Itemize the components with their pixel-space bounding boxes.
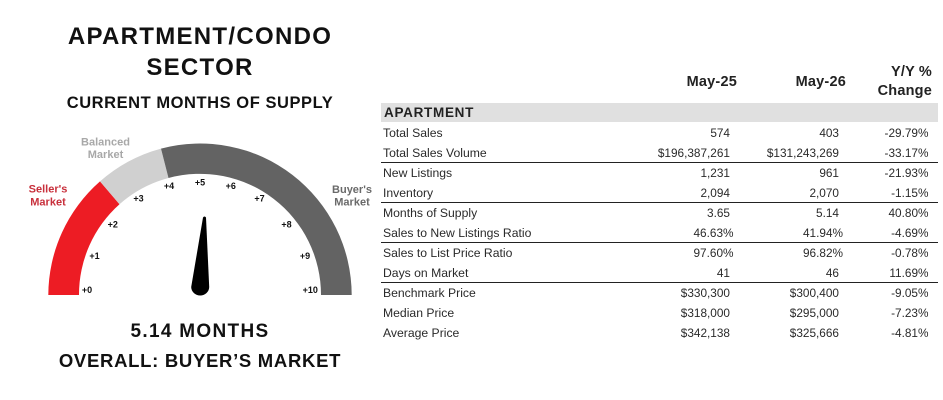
table column heading: May-25: May-25 (687, 74, 737, 90)
row: average price (383, 326, 928, 340)
gauge segment: seller's market (48, 181, 119, 295)
table column heading: Y/Y change: Y/Y % (891, 64, 932, 80)
row: sales to list price ratio: -0.78% (891, 246, 928, 260)
row: new listings (383, 166, 928, 180)
row: sales to new listings ratio: -4.69% (891, 226, 928, 240)
table column heading: Y/Y change: Change (878, 83, 932, 99)
gauge value: 5.14 MONTHS (131, 321, 269, 342)
row: sales to list price ratio (383, 246, 928, 260)
gauge chart (29, 137, 372, 296)
row: median price: $318,000 (681, 306, 730, 320)
row: sales to list price ratio: Sales to List Price Ratio (383, 246, 512, 260)
gauge segment: buyer's market (161, 144, 352, 295)
row: days on market: 41 (717, 266, 730, 280)
row: new listings: 961 (819, 166, 839, 180)
subtitle: CURRENT MONTHS OF SUPPLY (67, 94, 333, 112)
row: inventory (383, 186, 928, 200)
row: median price: Median Price (383, 306, 454, 320)
row: days on market: 46 (826, 266, 839, 280)
table column heading: May-26: May-26 (796, 74, 846, 90)
table column heading: Y/Y change (878, 64, 932, 99)
row: days on market: Days on Market (383, 266, 468, 280)
gauge scale labels: +1 (89, 251, 100, 261)
gauge scale labels: +7 (254, 194, 265, 204)
row: total sales volume: $131,243,269 (767, 146, 839, 160)
gauge scale labels: +5 (195, 178, 205, 188)
gauge scale labels: +3 (133, 194, 144, 204)
gauge scale labels: +2 (108, 220, 118, 230)
row: new listings: New Listings (383, 166, 452, 180)
row: sales to list price ratio: 96.82% (803, 246, 843, 260)
row: average price: -4.81% (891, 326, 928, 340)
row: benchmark price: $330,300 (681, 286, 730, 300)
gauge scale labels: +8 (281, 220, 292, 230)
label: seller's market: Seller's (29, 184, 67, 196)
row: benchmark price (383, 286, 928, 300)
row: average price: $342,138 (681, 326, 730, 340)
row: months of supply: 5.14 (816, 206, 839, 220)
row: days on market (383, 266, 928, 280)
table section band (381, 103, 938, 122)
label: seller's market (29, 184, 67, 208)
row: months of supply (383, 206, 928, 220)
gauge segment: balanced market (100, 149, 168, 204)
row: sales to new listings ratio: Sales to New Listings Ratio (383, 226, 531, 240)
row: new listings: -21.93% (885, 166, 928, 180)
label: balanced market (81, 137, 130, 161)
row: average price: $325,666 (790, 326, 839, 340)
row: inventory: 2,070 (809, 186, 839, 200)
label: balanced market: Market (88, 149, 124, 161)
row: median price: $295,000 (790, 306, 839, 320)
row: benchmark price: -9.05% (891, 286, 928, 300)
row: total sales: Total Sales (383, 126, 443, 140)
row: new listings: 1,231 (700, 166, 730, 180)
row: months of supply: Months of Supply (383, 206, 477, 220)
label: buyer's market: Buyer's (332, 184, 372, 196)
gauge scale labels: +6 (226, 181, 236, 191)
label: seller's market: Market (30, 196, 66, 208)
row: sales to new listings ratio (383, 226, 928, 240)
label: buyer's market (332, 184, 372, 208)
row: months of supply: 40.80% (888, 206, 928, 220)
row: inventory: 2,094 (700, 186, 730, 200)
market verdict: OVERALL: BUYER’S MARKET (59, 350, 341, 371)
needle (191, 216, 209, 296)
row: total sales volume (383, 146, 928, 160)
row: months of supply: 3.65 (707, 206, 730, 220)
row: sales to new listings ratio: 41.94% (803, 226, 843, 240)
row: inventory: -1.15% (891, 186, 928, 200)
label: balanced market: Balanced (81, 137, 130, 149)
row: benchmark price: Benchmark Price (383, 286, 476, 300)
table section band: APARTMENT (384, 105, 474, 120)
gauge scale labels (82, 178, 318, 295)
gauge scale labels: +0 (82, 285, 92, 295)
label: buyer's market: Market (334, 196, 370, 208)
row: benchmark price: $300,400 (790, 286, 839, 300)
title: APARTMENT/CONDO (68, 23, 332, 50)
row: total sales: -29.79% (885, 126, 928, 140)
gauge scale labels: +9 (300, 251, 310, 261)
row: days on market: 11.69% (889, 266, 928, 280)
row: total sales (383, 126, 928, 140)
row: average price: Average Price (383, 326, 459, 340)
row: total sales: 403 (819, 126, 839, 140)
gauge scale labels: +10 (303, 285, 318, 295)
row: inventory: Inventory (383, 186, 433, 200)
gauge scale labels: +4 (164, 181, 174, 191)
row: sales to list price ratio: 97.60% (693, 246, 734, 260)
row: total sales volume: Total Sales Volume (383, 146, 487, 160)
row: median price (383, 306, 928, 320)
row: total sales volume: $196,387,261 (658, 146, 730, 160)
row: total sales: 574 (710, 126, 730, 140)
title: SECTOR (146, 54, 254, 81)
title (68, 23, 332, 81)
row: median price: -7.23% (891, 306, 928, 320)
row: sales to new listings ratio: 46.63% (693, 226, 734, 240)
row: total sales volume: -33.17% (885, 146, 928, 160)
